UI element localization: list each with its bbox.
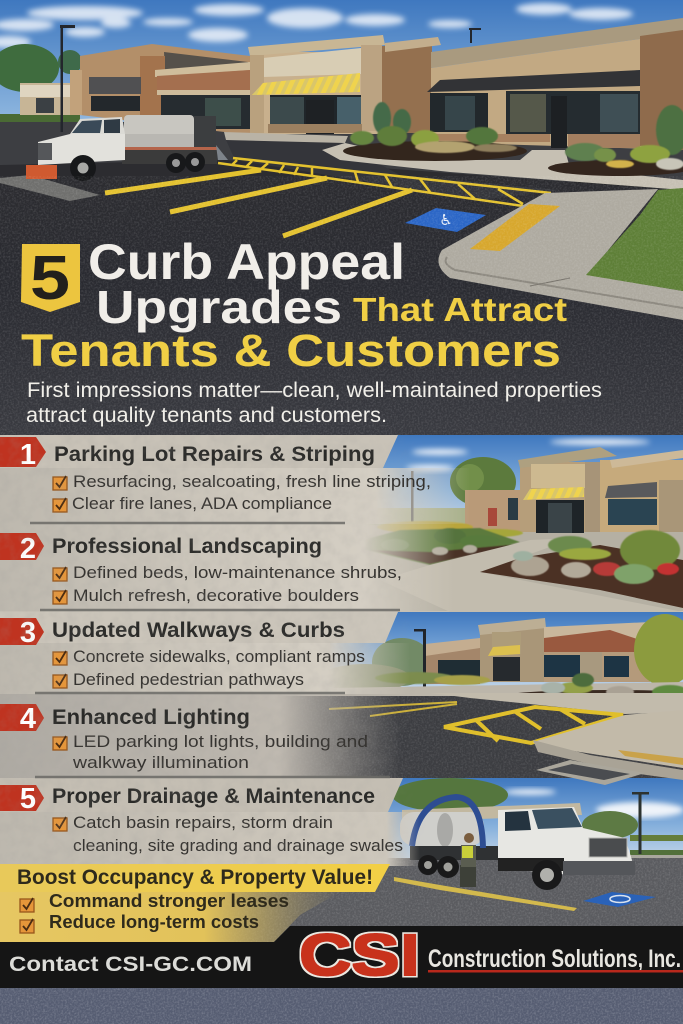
grass bbox=[586, 188, 683, 291]
number badge bbox=[0, 533, 44, 565]
heading: Proper Drainage & Maintenance bbox=[52, 784, 375, 808]
planter bed center bbox=[343, 102, 527, 161]
pavement bbox=[0, 855, 683, 942]
building bbox=[465, 447, 683, 533]
stone background bbox=[0, 524, 455, 611]
heading that attract: That Attract bbox=[353, 291, 567, 328]
hero photo: shopping plaza and parking lot bbox=[0, 0, 683, 440]
wheels bbox=[418, 855, 562, 890]
scene: small building behind row 3 bbox=[320, 612, 683, 704]
intro paragraph bbox=[26, 379, 602, 427]
bottom asphalt strip bbox=[0, 988, 683, 1024]
tank bbox=[400, 812, 484, 847]
heading: Enhanced Lighting bbox=[52, 705, 250, 729]
item: Mulch refresh, decorative boulders bbox=[73, 586, 359, 605]
stone background bbox=[0, 435, 470, 524]
light pole bbox=[411, 471, 414, 533]
brick tower bbox=[382, 37, 441, 133]
intro paragraph: First impressions matter—clean, well-maintained properties bbox=[27, 379, 602, 402]
item: Defined pedestrian pathways bbox=[73, 670, 304, 689]
lamp post bbox=[632, 792, 649, 854]
right building wing bbox=[427, 18, 683, 150]
tactile ramp strip bbox=[470, 204, 560, 251]
sky and trees bbox=[380, 778, 683, 858]
worker bbox=[460, 833, 476, 887]
planter bed right bbox=[548, 105, 683, 176]
parking lines bbox=[329, 702, 457, 716]
red rule bbox=[428, 970, 683, 972]
stone background bbox=[0, 778, 420, 866]
callout: boost occupancy bbox=[0, 864, 390, 942]
stone background bbox=[0, 694, 400, 778]
cab bbox=[498, 807, 632, 875]
lamp post bbox=[414, 629, 426, 688]
yellow banner bbox=[0, 864, 390, 892]
stone texture bbox=[0, 437, 378, 854]
item: Defined beds, low-maintenance shrubs, bbox=[73, 563, 402, 582]
number badge: 2 bbox=[20, 533, 36, 565]
dark awning bbox=[427, 70, 640, 92]
distant concrete bbox=[430, 693, 683, 714]
heading line 1: Curb Appeal bbox=[88, 234, 405, 290]
item: cleaning, site grading and drainage swales bbox=[73, 836, 403, 855]
item bbox=[53, 813, 403, 855]
number badge bbox=[0, 783, 44, 815]
lower fade panel bbox=[0, 892, 340, 942]
badge: number 5 shield: 5 bbox=[30, 244, 70, 313]
yellow awning bbox=[523, 487, 584, 500]
building bbox=[425, 618, 650, 684]
number badge: 1 bbox=[20, 439, 36, 471]
far building bbox=[20, 83, 72, 115]
center building with yellow awning bbox=[248, 35, 385, 134]
number badge bbox=[0, 437, 46, 471]
heading: Updated Walkways & Curbs bbox=[52, 618, 345, 642]
yellow parking striping bbox=[105, 158, 551, 236]
number badge: 4 bbox=[20, 703, 36, 735]
heading: Professional Landscaping bbox=[52, 534, 322, 558]
tree bbox=[450, 457, 516, 527]
item: LED parking lot lights, building and bbox=[73, 732, 368, 751]
heading: Parking Lot Repairs & Striping bbox=[54, 442, 375, 466]
drive lane bbox=[226, 140, 560, 200]
item: Catch basin repairs, storm drain bbox=[73, 813, 333, 832]
sky bbox=[330, 612, 683, 690]
sky bbox=[0, 0, 683, 180]
contact: Contact CSI-GC.COM bbox=[9, 953, 252, 976]
sidewalk corner and curb bbox=[438, 189, 683, 320]
sidewalk bbox=[380, 538, 683, 612]
footer background bbox=[0, 926, 683, 988]
left building bbox=[70, 44, 251, 135]
truck deck background bbox=[402, 803, 582, 822]
title block bbox=[21, 234, 602, 427]
item: Resurfacing, sealcoating, fresh line striping, bbox=[73, 472, 431, 491]
logo: CSI: CSI bbox=[299, 923, 420, 988]
number badge: 3 bbox=[20, 617, 36, 649]
trees bbox=[320, 638, 432, 692]
callout item: Reduce long-term costs bbox=[49, 912, 259, 932]
trees bbox=[0, 44, 82, 126]
intro paragraph: attract quality tenants and customers. bbox=[26, 404, 387, 427]
yellow awning bbox=[488, 645, 520, 656]
number badge bbox=[0, 703, 44, 735]
panel: row 2 professional landscaping bbox=[0, 524, 455, 611]
scene: building and landscaping behind rows 1 and 2 bbox=[340, 435, 683, 612]
panel: row 5 drainage and maintenance bbox=[0, 778, 420, 866]
item bbox=[53, 732, 368, 772]
accessible parking symbol: ♿ bbox=[439, 211, 453, 229]
storm drain grate bbox=[536, 760, 645, 785]
heading line 2: Upgrades bbox=[96, 281, 342, 333]
horizon bbox=[340, 508, 520, 528]
clouds bbox=[0, 3, 633, 48]
item: walkway illumination bbox=[72, 753, 249, 772]
gravel edge bbox=[0, 175, 100, 201]
footer band bbox=[0, 923, 683, 988]
yellow line bbox=[394, 877, 577, 911]
sweeper truck bbox=[26, 115, 228, 181]
mulch bed with boulders and flowers bbox=[480, 530, 683, 608]
number badge bbox=[0, 617, 44, 649]
truck bbox=[400, 797, 635, 890]
accessible parking symbol bbox=[405, 208, 486, 232]
lawn and flower beds bbox=[345, 521, 523, 565]
callout heading: Boost Occupancy & Property Value! bbox=[17, 866, 373, 889]
ground base bbox=[0, 122, 683, 182]
stone background bbox=[0, 612, 410, 694]
tree right bbox=[634, 614, 683, 690]
path and beds bbox=[330, 672, 683, 704]
hatched zone bbox=[444, 707, 623, 743]
panel: row 3 updated walkways bbox=[0, 612, 410, 694]
asphalt lot bbox=[0, 160, 683, 440]
person bbox=[488, 508, 497, 526]
grille bbox=[589, 838, 627, 857]
curb and sidewalk bbox=[533, 710, 683, 780]
ground bbox=[340, 525, 683, 611]
accessible parking symbol bbox=[583, 892, 656, 907]
sky bbox=[340, 435, 683, 525]
callout item: Command stronger leases bbox=[49, 891, 289, 911]
panel: row 4 enhanced lighting bbox=[0, 694, 400, 778]
yellow awning bbox=[252, 73, 360, 95]
cab windows bbox=[505, 811, 531, 831]
stone base under rows bbox=[0, 435, 683, 866]
row dividers bbox=[30, 523, 400, 777]
heading tenants: Tenants & Customers bbox=[21, 325, 561, 376]
scene: vacuum truck behind row 5 bbox=[0, 778, 683, 942]
street lights bbox=[60, 25, 481, 132]
item: Clear fire lanes, ADA compliance bbox=[72, 494, 332, 513]
panel: row 1 parking lot repairs bbox=[0, 435, 470, 524]
bumper bbox=[563, 861, 635, 875]
vacuum boom bbox=[412, 797, 483, 848]
chassis bbox=[410, 846, 500, 860]
asphalt bbox=[250, 696, 683, 778]
item: Concrete sidewalks, compliant ramps bbox=[73, 647, 365, 666]
badge: number 5 shield bbox=[21, 244, 80, 313]
front walkway and islands bbox=[224, 132, 683, 190]
scene: asphalt with striping behind row 4 bbox=[250, 693, 683, 785]
number badge: 5 bbox=[20, 783, 36, 815]
asphalt texture bbox=[0, 176, 683, 440]
